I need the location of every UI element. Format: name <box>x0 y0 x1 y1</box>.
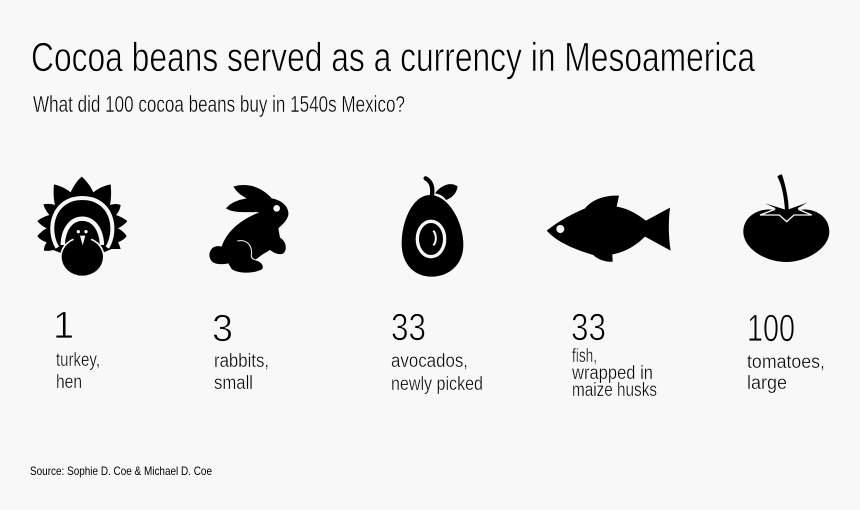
icon: turkey <box>37 177 127 277</box>
source note: Source: Sophie D. Coe & Michael D. Coe <box>30 464 212 478</box>
item: fish count <box>571 307 657 401</box>
item: fish count: fish, <box>572 346 597 367</box>
item: fish count: maize husks <box>572 380 657 401</box>
item: rabbit count: small <box>214 373 253 394</box>
item: tomato count: 100 <box>747 308 795 350</box>
item: rabbit count: 3 <box>212 308 233 350</box>
item: avocado count: 33 <box>391 307 426 349</box>
item: fish count: 33 <box>571 307 606 349</box>
icon: rabbit <box>209 185 288 273</box>
icon: fish <box>547 196 671 262</box>
item: turkey count: hen <box>56 372 82 393</box>
item: rabbit count <box>212 308 269 394</box>
subtitle: What did 100 cocoa beans buy in 1540s Mexico? <box>33 91 405 117</box>
item: tomato count: tomatoes, <box>747 352 825 373</box>
item: tomato count: large <box>747 373 787 394</box>
item: turkey count: turkey, <box>56 350 100 371</box>
item: avocado count: newly picked <box>391 374 483 395</box>
item: turkey count <box>53 305 100 393</box>
item: avocado count: avocados, <box>391 351 468 372</box>
item: avocado count <box>391 307 483 395</box>
item: rabbit count: rabbits, <box>214 351 269 372</box>
item: tomato count <box>747 308 825 394</box>
item: fish count: wrapped in <box>571 363 653 384</box>
icon: avocado <box>402 178 463 277</box>
icon: tomato <box>743 174 829 262</box>
item: turkey count: 1 <box>53 305 74 347</box>
